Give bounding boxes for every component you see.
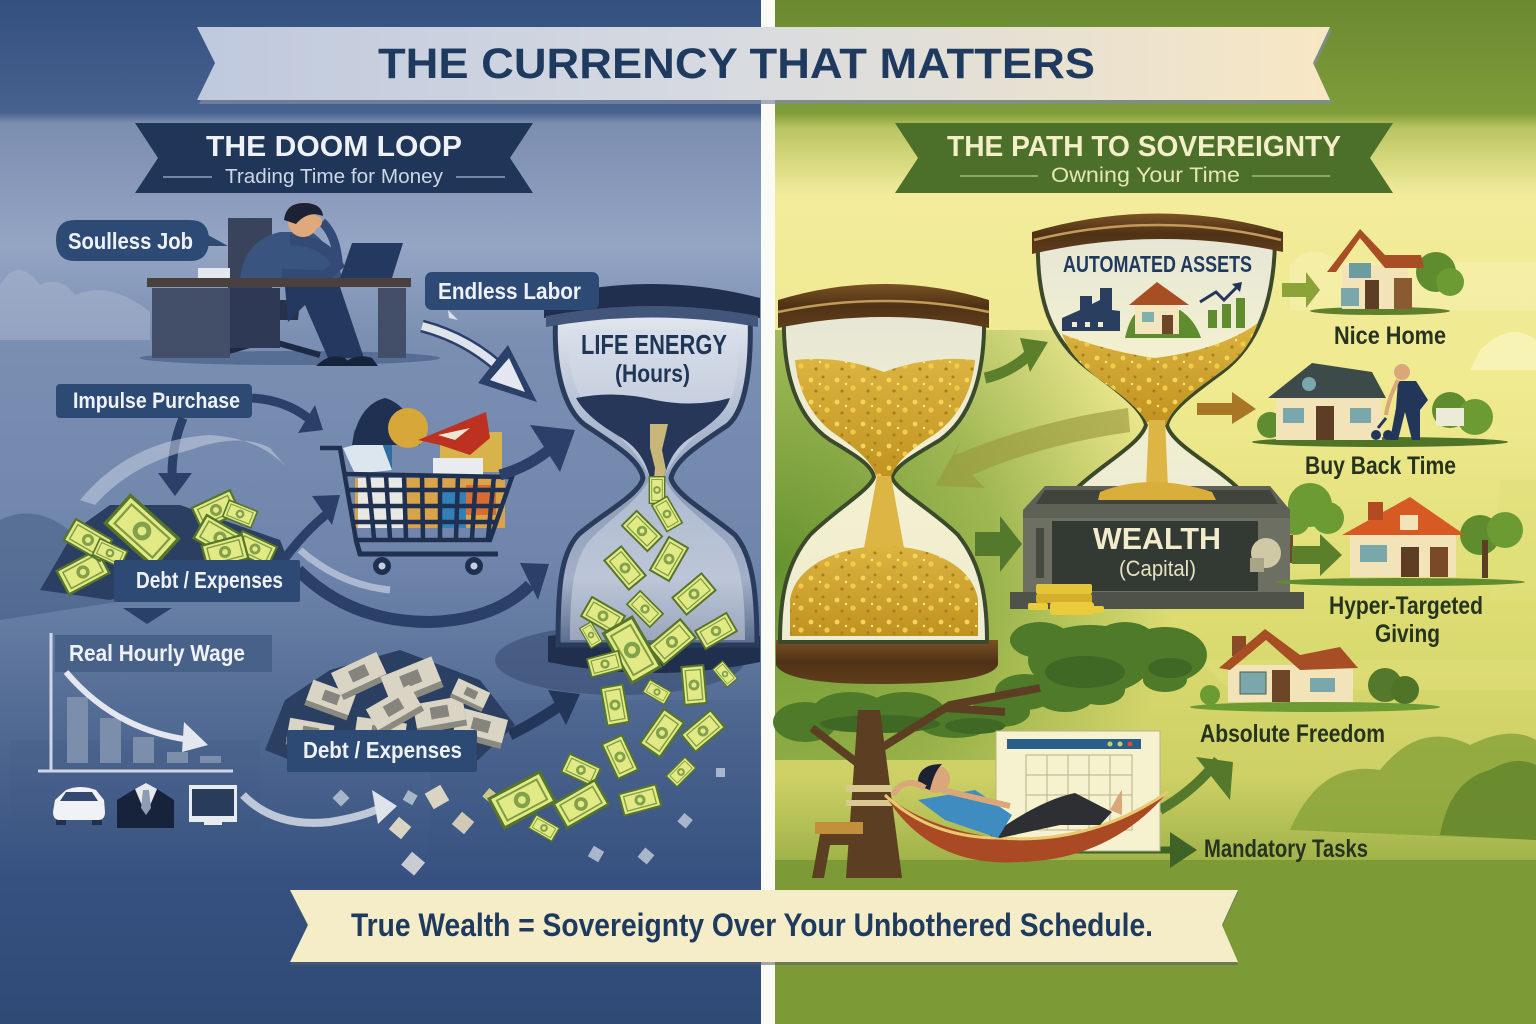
label: mandatory tasks: Mandatory Tasks — [1204, 835, 1368, 863]
dark sand — [576, 394, 730, 478]
arrow: hammock to freedom — [1160, 757, 1233, 810]
arrow: debt to hourglass — [298, 550, 549, 622]
text: wealth: WEALTH — [1093, 521, 1221, 556]
illustration: automated assets hourglass — [1032, 214, 1283, 490]
arrow: to buy back time — [1197, 392, 1256, 424]
title ribbon — [197, 27, 1332, 104]
cap — [778, 284, 989, 328]
label: nice home: Nice Home — [1334, 322, 1446, 350]
illustration: calendar — [996, 731, 1160, 851]
illustration: scattered fragments — [333, 768, 725, 876]
glass — [1038, 236, 1275, 490]
label: impulse purchase — [56, 384, 252, 418]
icon: growth chart — [1200, 282, 1245, 328]
hourglass glass — [555, 312, 757, 645]
torso — [240, 232, 342, 278]
top sand — [1062, 323, 1258, 425]
subheading: trading time for money: Trading Time for Money — [225, 166, 443, 188]
top sand — [795, 359, 975, 480]
arrow: impulse purchase to debt — [158, 418, 192, 496]
label: hyper-targeted giving: Giving — [1375, 620, 1440, 648]
illustration: stool — [812, 822, 866, 878]
label: hyper-targeted giving: Hyper-Targeted — [1329, 592, 1483, 620]
text: life energy: LIFE ENERGY — [581, 329, 727, 360]
title text: THE CURRENCY THAT MATTERS — [378, 40, 1095, 88]
label: real hourly wage — [55, 635, 272, 672]
label: debt / expenses (lower): Debt / Expenses — [303, 737, 462, 763]
heading: the doom loop: THE DOOM LOOP — [206, 131, 462, 163]
text: hours: (Hours) — [615, 360, 690, 388]
arrow: impulse purchase to cart — [252, 398, 323, 433]
icon: factory — [1062, 288, 1120, 331]
label: absolute freedom: Absolute Freedom — [1200, 720, 1385, 748]
label: soulless job: Soulless Job — [68, 228, 193, 254]
illustration: man slumped at desk — [140, 203, 440, 366]
falling sand — [1146, 420, 1168, 488]
cap — [1032, 214, 1283, 254]
icon: monitor — [189, 785, 237, 825]
arrow: endless labor to hourglass — [422, 326, 537, 402]
arrow: faded loop arc — [80, 435, 287, 505]
label: endless labor — [425, 272, 599, 320]
heading: the path to sovereignty: THE PATH TO SOVEREIGNTY — [947, 131, 1341, 163]
footer statement: True Wealth = Sovereignty Over Your Unbothered Schedule. — [351, 907, 1153, 943]
illustration: shopping cart with goods — [320, 398, 512, 575]
label: debt / expenses (upper): Debt / Expenses — [136, 567, 283, 593]
background: left blue panel — [0, 0, 762, 1024]
arrow: gold hourglass to wealth — [975, 516, 1022, 572]
background: right green panel — [774, 0, 1536, 1024]
subheading: owning your time: Owning Your Time — [1051, 164, 1240, 187]
hourglass base — [548, 629, 760, 673]
arrow: debt down to wage — [123, 608, 172, 624]
illustration: wealth safe — [1010, 482, 1304, 615]
label: soulless job — [56, 220, 228, 261]
arrow: assets to nice home — [1282, 272, 1320, 308]
glass — [780, 312, 987, 642]
arrow: gold hourglass to assets — [985, 338, 1048, 378]
left section header — [135, 123, 533, 193]
label: real hourly wage: Real Hourly Wage — [69, 640, 245, 666]
illustration: house for freedom — [1190, 629, 1440, 712]
white centre divider — [761, 0, 775, 1024]
illustration: tree behind safe — [1280, 483, 1344, 563]
falling banknotes — [487, 476, 738, 842]
reclining person — [893, 764, 1122, 838]
illustration: man relaxing in hammock — [885, 764, 1168, 862]
illustration: house for giving — [1275, 497, 1525, 586]
arrow: wealth to giving — [1292, 534, 1342, 576]
icon: small house — [1125, 282, 1201, 338]
illustration: life energy hourglass — [487, 284, 760, 842]
footer ribbon — [290, 890, 1238, 965]
label: endless labor: Endless Labor — [438, 278, 581, 304]
falling sand stream — [864, 476, 904, 548]
illustration: gold sand hourglass — [776, 284, 998, 684]
arm and hand on brow — [282, 240, 338, 276]
text: capital: (Capital) — [1119, 556, 1196, 581]
icon: business suit — [117, 783, 174, 828]
right section header — [895, 123, 1393, 193]
safe dial — [1250, 538, 1281, 572]
person mowing — [1371, 364, 1428, 440]
illustration: scattered cash pile — [40, 489, 290, 600]
arrow: falling wage — [66, 672, 208, 752]
chart: real hourly wage — [38, 633, 272, 772]
illustration: nice home — [1310, 229, 1464, 315]
arrow: debt to cart — [280, 495, 340, 565]
illustration: grey cash block pile — [265, 650, 515, 760]
arrow: cart to hourglass — [500, 425, 575, 475]
base — [776, 640, 998, 684]
label: buy back time: Buy Back Time — [1305, 452, 1456, 480]
arrow: to mandatory tasks — [1060, 832, 1197, 868]
label: impulse purchase: Impulse Purchase — [73, 388, 240, 413]
arrow: purchases to scattered debris — [243, 790, 397, 824]
icon: gold coins — [1028, 584, 1104, 615]
label: hyper-targeted giving — [1329, 592, 1483, 648]
label: debt / expenses (upper) — [114, 560, 300, 602]
text: automated assets: AUTOMATED ASSETS — [1063, 251, 1252, 277]
label: debt / expenses (lower) — [287, 730, 477, 772]
icon: car — [53, 787, 105, 825]
arrow: faded return path — [935, 408, 1130, 488]
trousers — [285, 287, 364, 358]
hourglass cap — [544, 284, 760, 318]
arrow: grey pile to hourglass — [510, 690, 580, 735]
bottom sand — [790, 546, 978, 636]
illustration: shady tree — [773, 622, 1207, 878]
illustration: house with gardener — [1252, 363, 1508, 447]
